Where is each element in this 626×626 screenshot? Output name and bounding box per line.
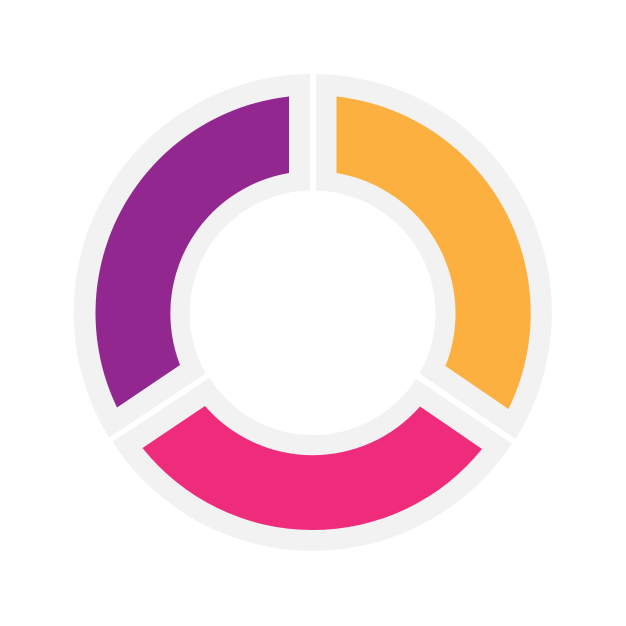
panel: bottom gray segment backing [112, 378, 512, 551]
segment: orange [336, 96, 531, 409]
panel: left gray segment backing [74, 74, 310, 438]
segment: purple [96, 96, 289, 408]
panel: right gray segment backing [316, 74, 552, 439]
segment: pink [142, 406, 482, 530]
